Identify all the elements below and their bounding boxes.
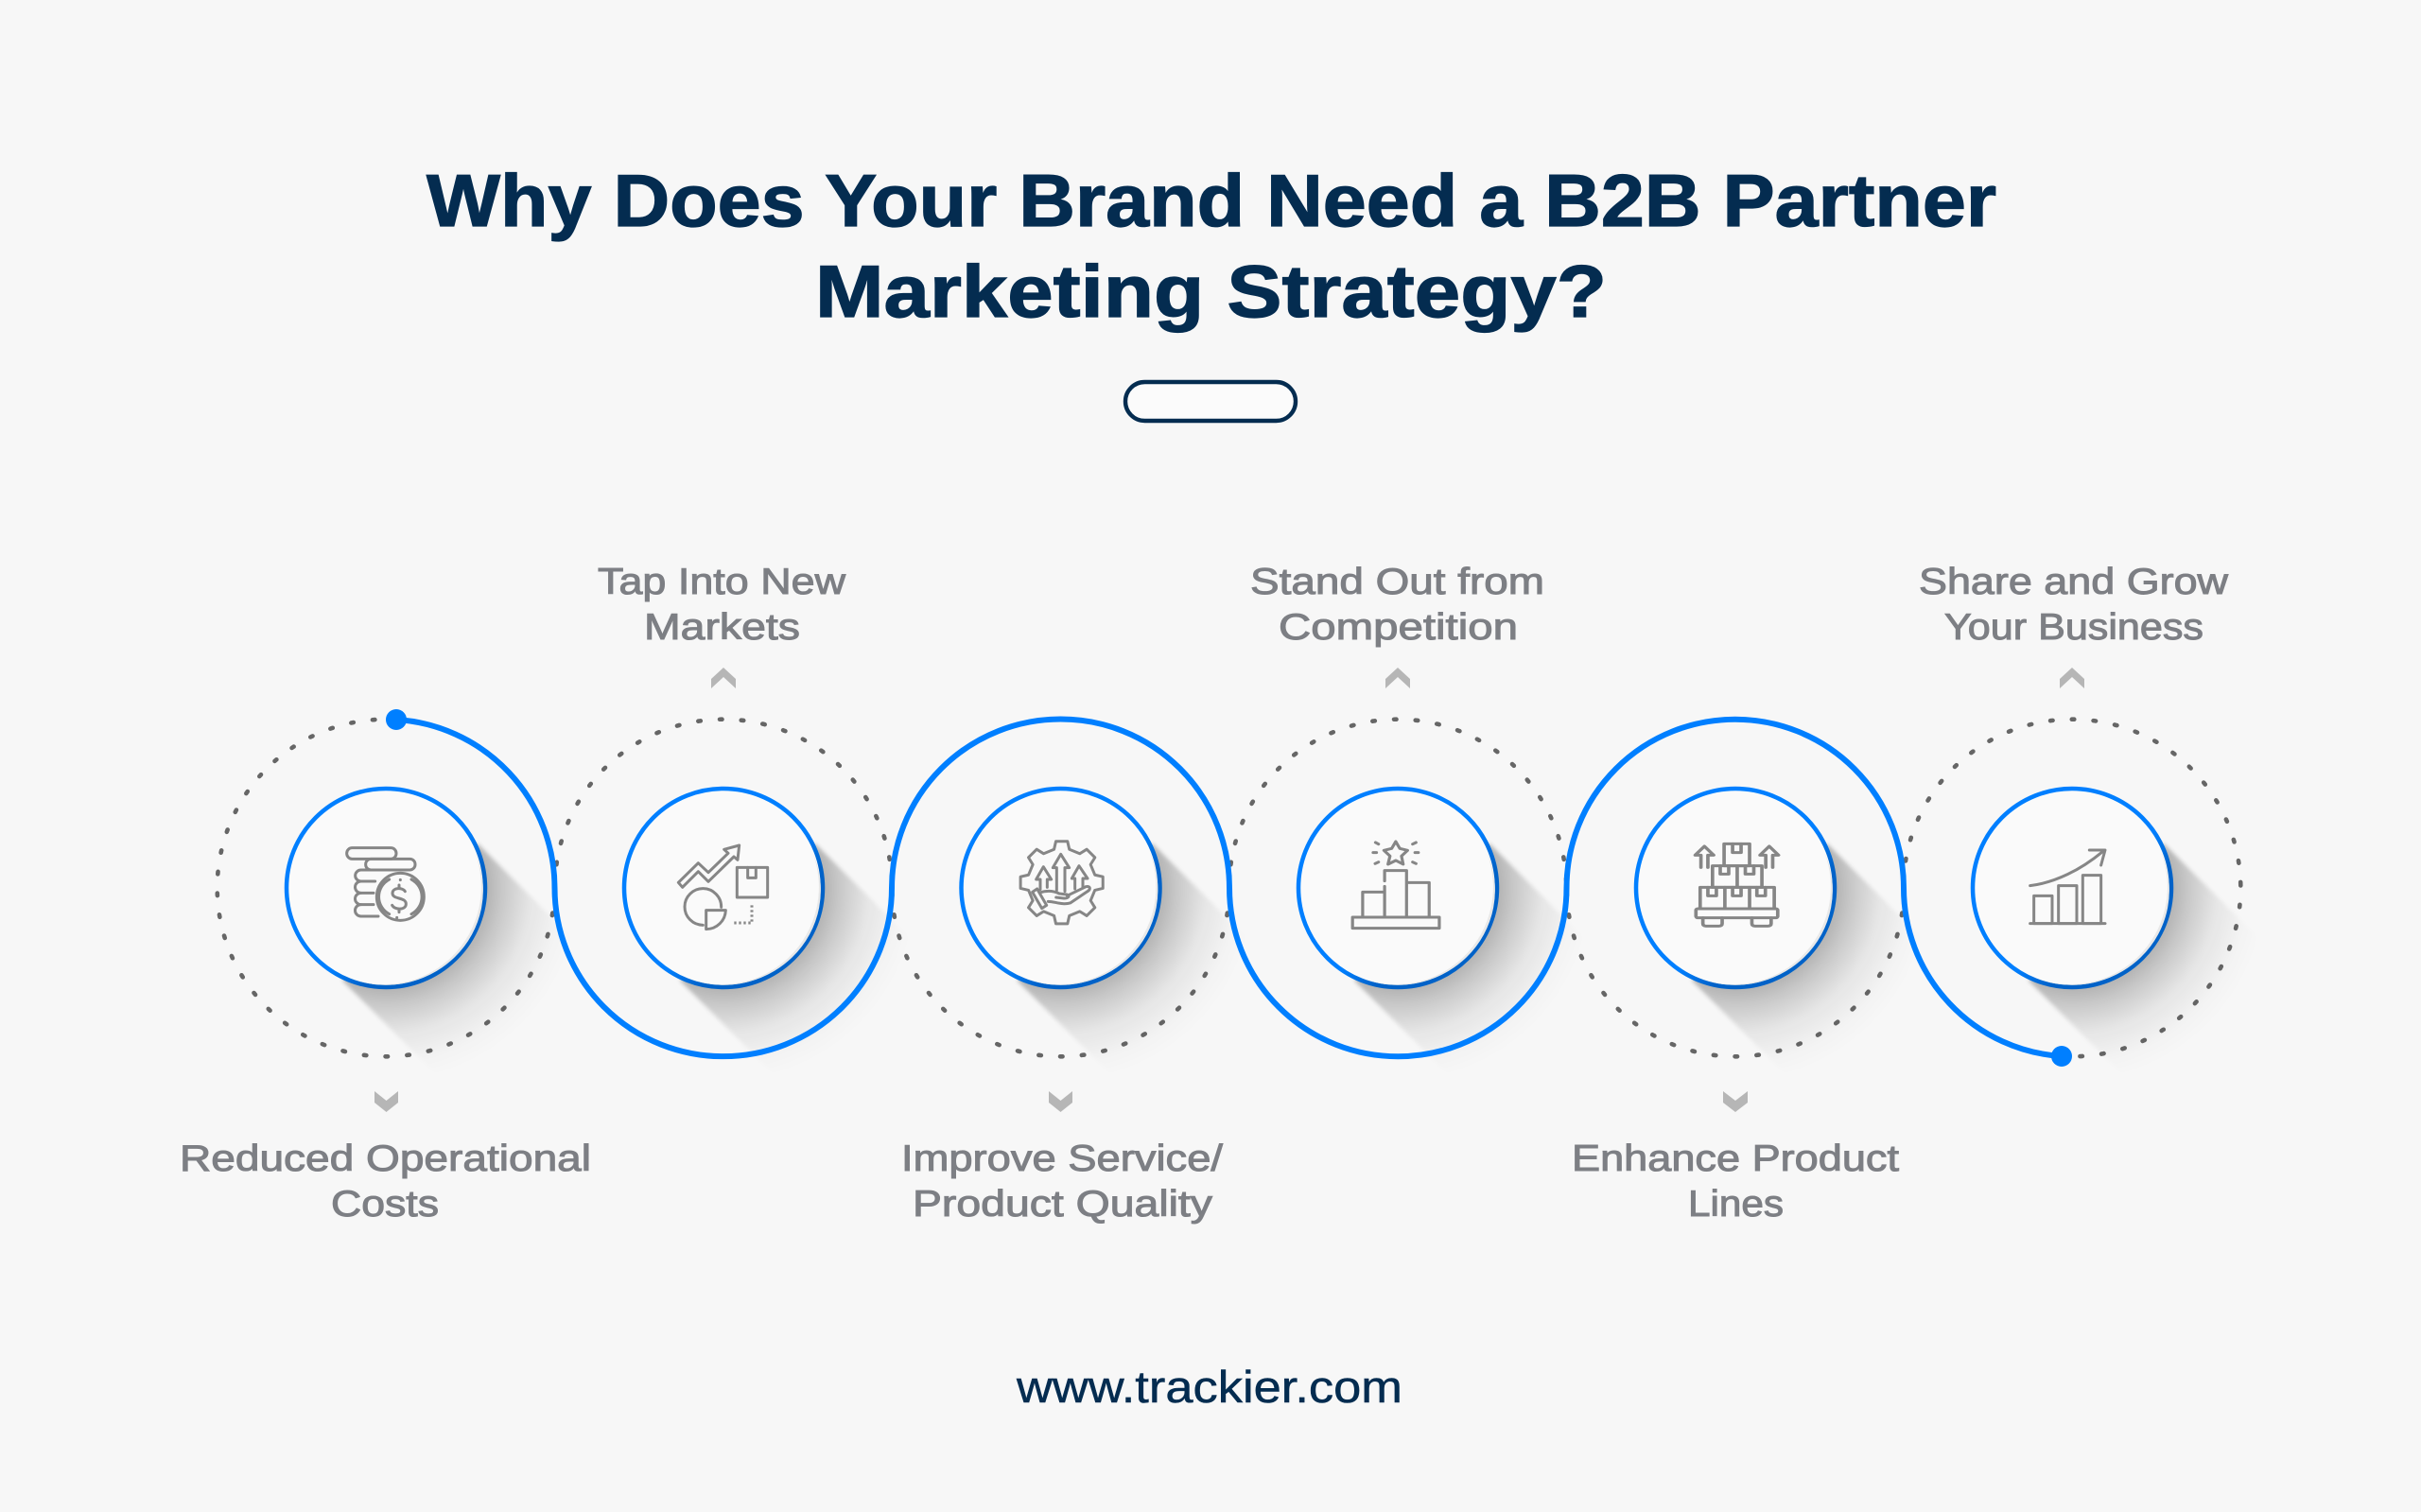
label: Product Quality (913, 1184, 1213, 1225)
label: Stand Out from (1250, 562, 1544, 602)
chevron (711, 668, 736, 688)
label: Reduced Operational (180, 1138, 591, 1179)
icon: stacked boxes on pallet (1695, 843, 1779, 926)
label (598, 562, 846, 648)
label (1250, 562, 1544, 648)
label (1572, 1138, 1899, 1225)
label (180, 1138, 591, 1225)
chevron (1723, 1091, 1748, 1112)
label: Lines (1688, 1184, 1784, 1225)
label: Share and Grow (1919, 562, 2229, 602)
label (901, 1138, 1223, 1225)
label: Tap Into New (598, 562, 846, 602)
chevron (2060, 668, 2084, 688)
label: Your Business (1944, 607, 2203, 648)
icon: coins (347, 848, 424, 920)
chevron (374, 1091, 398, 1112)
title pill accent (1125, 382, 1296, 421)
step 3: improve service / product quality (893, 787, 1229, 1224)
step 6: share and grow your business (1904, 566, 2243, 1059)
label: Enhance Product (1572, 1138, 1899, 1179)
label: Competition (1279, 607, 1518, 648)
label: Costs (331, 1184, 439, 1225)
label (1919, 562, 2229, 648)
chevron (1385, 668, 1410, 688)
label: Improve Service/ (901, 1138, 1223, 1179)
step 4: stand out from competition (1229, 566, 1566, 1050)
infographic canvas (183, 172, 2243, 1403)
title: Why Does Your Brand Need a B2B Partner (427, 159, 1996, 242)
blue connector path with end dots (386, 709, 2072, 1067)
title: Marketing Strategy? (815, 250, 1607, 333)
title (427, 159, 1996, 333)
step 5: enhance product lines (1567, 787, 1904, 1217)
icon: podium with star (1352, 842, 1439, 929)
step 2: tap into new markets (555, 567, 892, 1050)
icon: gear with hand and arrows (1020, 842, 1103, 924)
footer url: www.trackier.com (1016, 1362, 1402, 1412)
step 1: reduced operational costs (180, 716, 619, 1225)
chevron (1049, 1091, 1072, 1112)
icon: market growth (678, 845, 768, 930)
icon: rising bar chart (2030, 850, 2105, 924)
label: Markets (644, 607, 800, 648)
